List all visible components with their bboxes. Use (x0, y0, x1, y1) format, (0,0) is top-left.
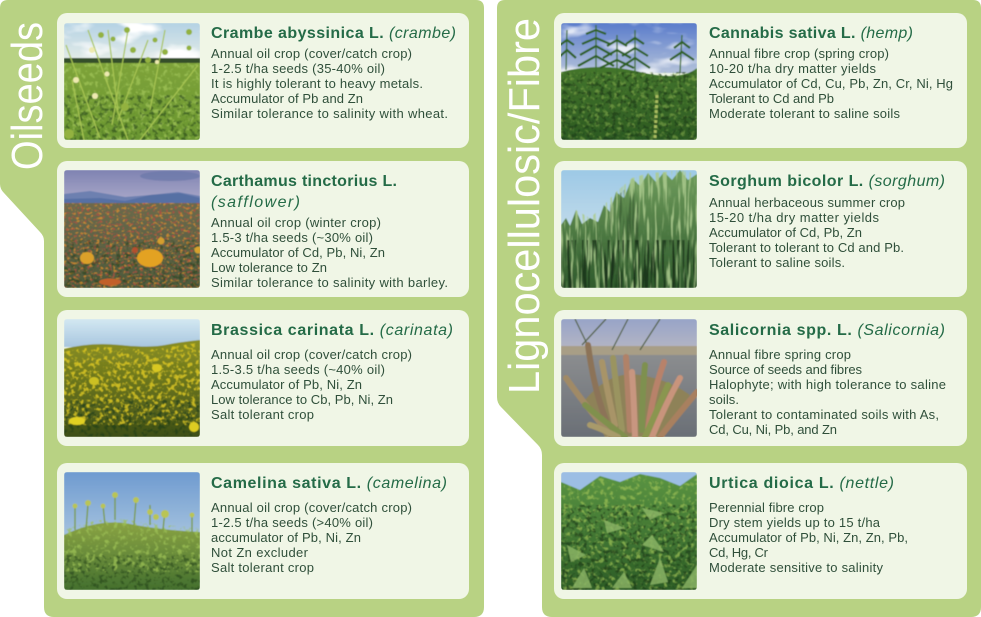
description: carinata: Annual oil crop (cover/catch crop) (211, 347, 412, 362)
description: camelina: accumulator of Pb, Ni, Zn (211, 530, 361, 545)
description: hemp: Moderate tolerant to saline soils (709, 106, 900, 121)
description: crambe: Annual oil crop (cover/catch crop) (211, 46, 412, 61)
description: hemp: Accumulator of Cd, Cu, Pb, Zn, Cr, Ni, Hg (709, 76, 953, 91)
description: nettle: Dry stem yields up to 15 t/ha (709, 515, 881, 530)
description: carinata: Accumulator of Pb, Ni, Zn (211, 377, 362, 392)
description: carinata: 1.5-3.5 t/ha seeds (~40% oil) (211, 362, 385, 377)
photo: hemp (558, 23, 697, 140)
title: sorghum: Sorghum bicolor L. (sorghum) (709, 173, 945, 190)
description: Salicornia: Cd, Cu, Ni, Pb, and Zn (709, 422, 837, 437)
title: hemp: Cannabis sativa L. (hemp) (709, 25, 913, 42)
card: hemp (554, 13, 967, 148)
description: camelina (211, 500, 412, 575)
description: camelina: Not Zn excluder (211, 545, 309, 560)
photo: nettle (561, 472, 697, 590)
card: Salicornia (554, 310, 967, 446)
title: Salicornia: Salicornia spp. L. (Salicornia) (709, 322, 945, 339)
title: carinata: Brassica carinata L. (carinata) (211, 322, 453, 339)
description: nettle: Perennial fibre crop (709, 500, 824, 515)
photo: camelina (64, 472, 200, 590)
description: nettle: Moderate sensitive to salinity (709, 560, 884, 575)
description: camelina: Annual oil crop (cover/catch crop) (211, 500, 412, 515)
description: hemp: 10-20 t/ha dry matter yields (709, 61, 876, 76)
title: safflower: Carthamus tinctorius L. (211, 173, 397, 190)
description: crambe: Similar tolerance to salinity with wheat. (211, 106, 448, 121)
description: crambe: 1-2.5 t/ha seeds (35-40% oil) (211, 61, 385, 76)
heading: Oilseeds: Oilseeds (3, 22, 52, 170)
heading: Lignocellulosic/Fibre: Lignocellulosic/Fibre (500, 18, 549, 394)
description: Salicornia: Halophyte; with high tolerance to saline (709, 377, 946, 392)
description: carinata: Salt tolerant crop (211, 407, 314, 422)
card: sorghum (554, 161, 967, 297)
photo: safflower (64, 170, 202, 288)
description: sorghum: Tolerant to saline soils. (709, 255, 845, 270)
description: nettle: Cd, Hg, Cr (709, 545, 769, 560)
description: Salicornia: Tolerant to contaminated soils with As, (709, 407, 939, 422)
description: safflower: Low tolerance to Zn (211, 260, 327, 275)
description: carinata (211, 347, 412, 422)
description: safflower: Accumulator of Cd, Pb, Ni, Zn (211, 245, 385, 260)
description: safflower: 1.5-3 t/ha seeds (~30% oil) (211, 230, 373, 245)
description: Salicornia: Source of seeds and fibres (709, 362, 862, 377)
description: sorghum (709, 195, 905, 270)
description: hemp: Tolerant to Cd and Pb (709, 91, 834, 106)
description: crambe (211, 46, 448, 121)
photo: sorghum (561, 170, 697, 288)
description: safflower (211, 215, 448, 290)
title: crambe: Crambe abyssinica L. (crambe) (211, 25, 456, 42)
description: crambe: It is highly tolerant to heavy metals. (211, 76, 423, 91)
card: crambe (57, 13, 469, 148)
photo: crambe (64, 23, 200, 140)
photo: carinata (64, 319, 200, 437)
panel: Oilseeds (0, 0, 484, 617)
card: nettle (554, 463, 967, 599)
description: carinata: Low tolerance to Cb, Pb, Ni, Zn (211, 392, 393, 407)
description: Salicornia (709, 347, 946, 437)
description: hemp: Annual fibre crop (spring crop) (709, 46, 889, 61)
card: camelina (57, 463, 469, 599)
panel background: Oilseeds (0, 0, 484, 617)
description: sorghum: 15-20 t/ha dry matter yields (709, 210, 880, 225)
description: sorghum: Annual herbaceous summer crop (709, 195, 905, 210)
description: nettle (709, 500, 908, 575)
description: nettle: Accumulator of Pb, Ni, Zn, Zn, Pb, (709, 530, 908, 545)
description: Salicornia: Annual fibre spring crop (709, 347, 851, 362)
description: safflower: Annual oil crop (winter crop) (211, 215, 381, 230)
description: Salicornia: soils. (709, 392, 739, 407)
description: safflower: Similar tolerance to salinity with barley. (211, 275, 448, 290)
panel background: Lignocellulosic/Fibre (497, 0, 981, 617)
card: safflower (57, 161, 469, 297)
description: camelina: 1-2.5 t/ha seeds (>40% oil) (211, 515, 373, 530)
description: sorghum: Tolerant to tolerant to Cd and Pb. (709, 240, 904, 255)
photo: Salicornia (561, 319, 697, 437)
description: camelina: Salt tolerant crop (211, 560, 314, 575)
description: sorghum: Accumulator of Cd, Pb, Zn (709, 225, 862, 240)
title: nettle: Urtica dioica L. (nettle) (709, 475, 894, 492)
panel: Lignocellulosic/Fibre (497, 0, 981, 617)
description: crambe: Accumulator of Pb and Zn (211, 91, 363, 106)
card: carinata (57, 310, 469, 446)
title: camelina: Camelina sativa L. (camelina) (211, 475, 447, 492)
description: hemp (709, 46, 953, 121)
card: safflower: (safflower) (211, 194, 300, 211)
